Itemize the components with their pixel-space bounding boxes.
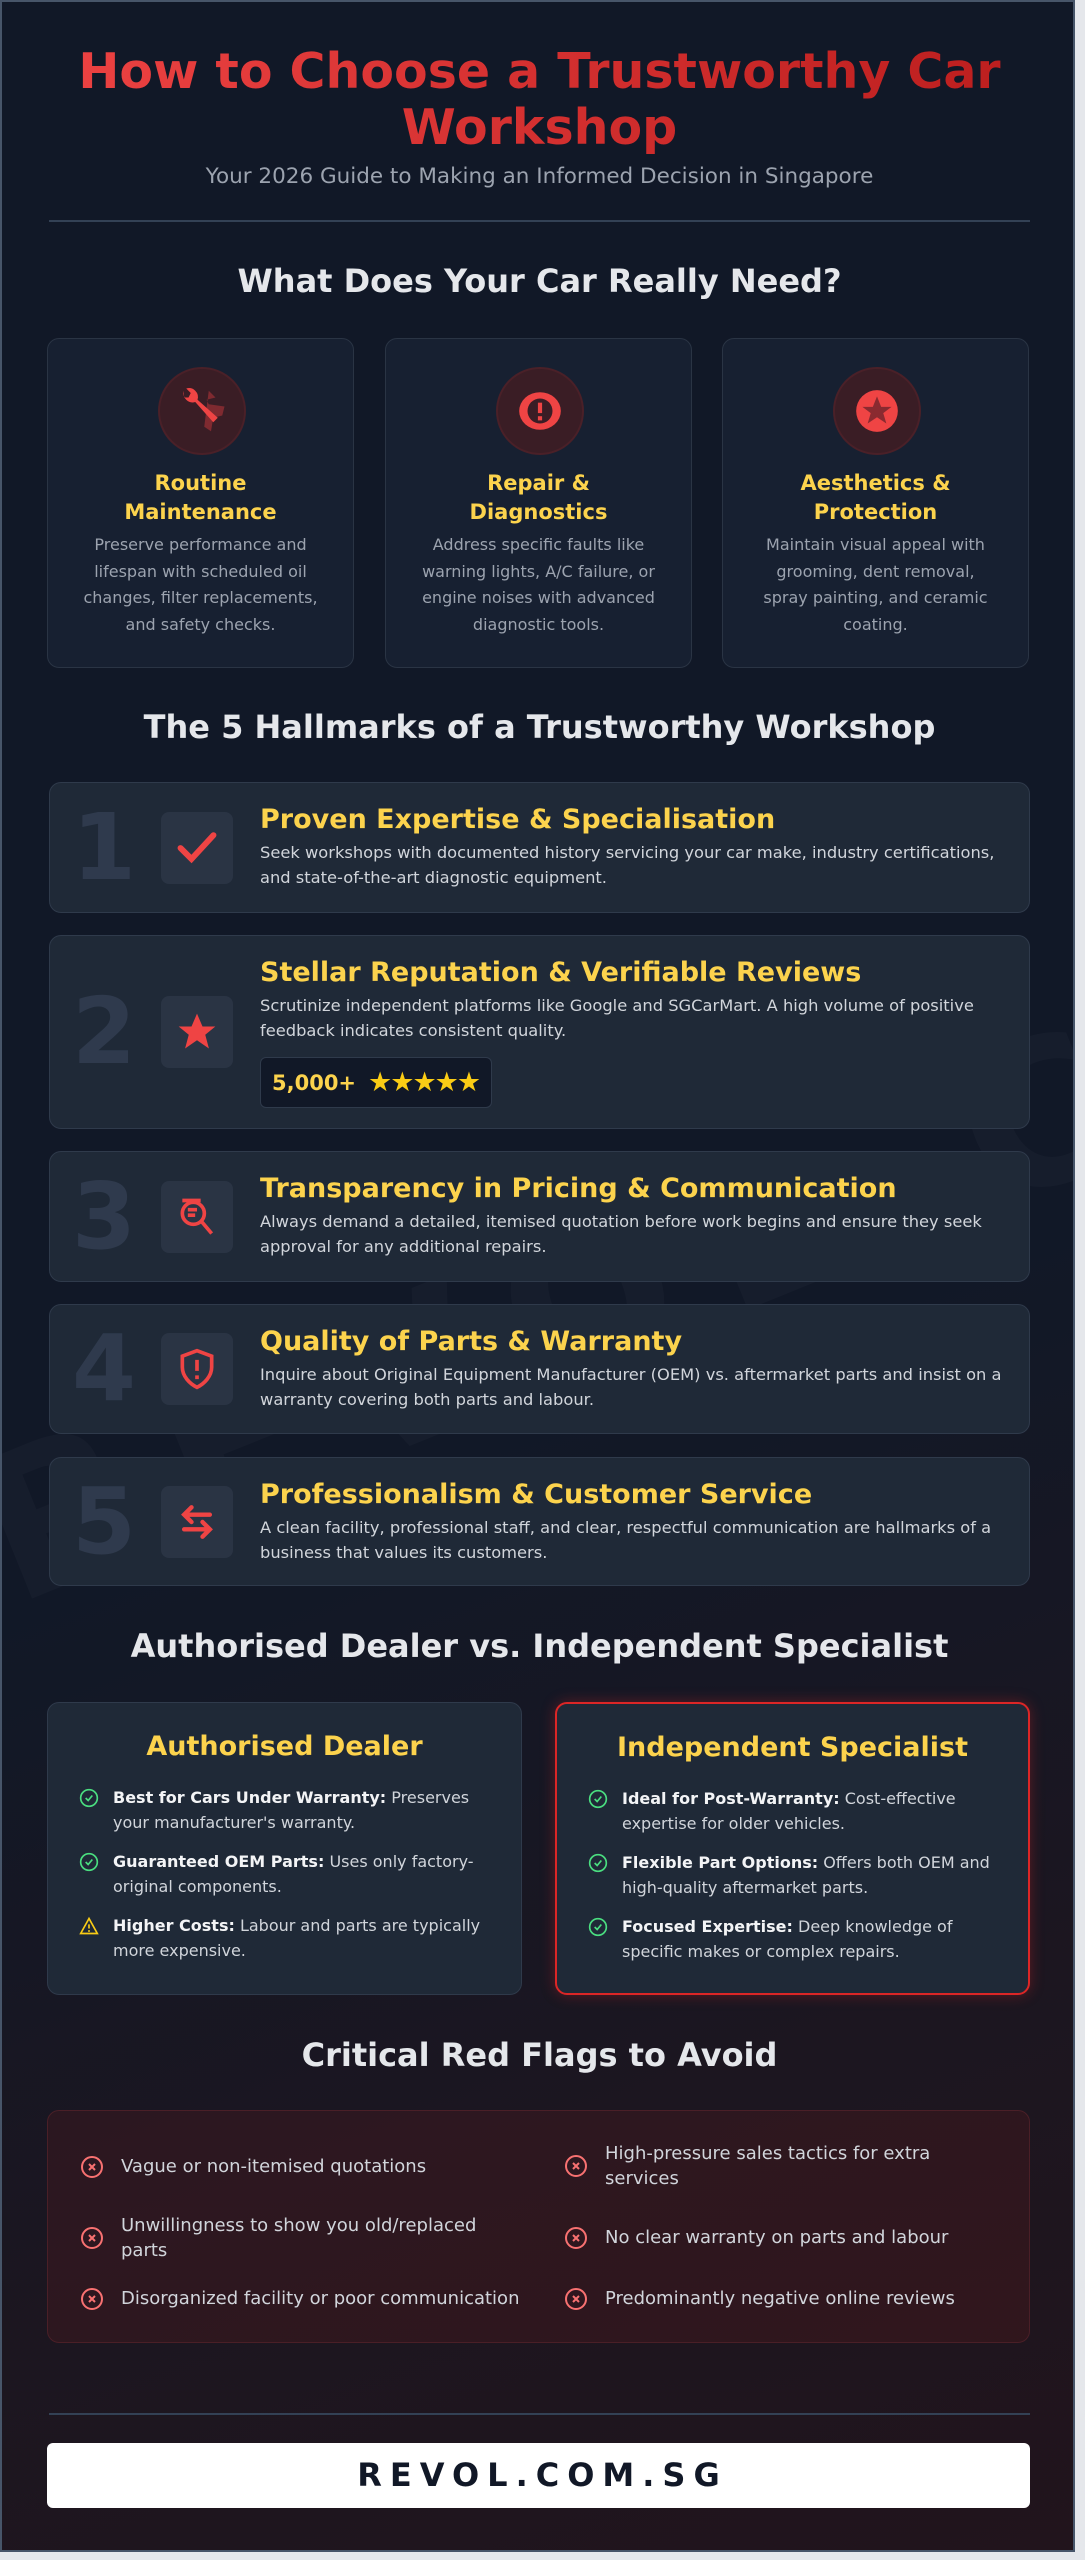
panel: independent specialist: Ideal for Post-Warranty: Cost-effective expertise for older vehicles. — [622, 1789, 956, 1833]
panel: authorised dealer: Best for Cars Under Warranty: Preserves your manufacturer's warranty. — [113, 1788, 469, 1832]
card: aesthetics — [722, 338, 1029, 668]
card: aesthetics: Maintain visual appeal with grooming, dent removal, spray painting, and ceramic coating. — [763, 535, 988, 634]
hallmark 1: 1 — [72, 794, 136, 900]
heading: needs: What Does Your Car Really Need? — [238, 262, 842, 300]
icon: search — [161, 1180, 233, 1252]
hallmark 5: Professionalism & Customer Service — [260, 1479, 812, 1510]
heading: comparison: Authorised Dealer vs. Independent Specialist — [131, 1627, 948, 1665]
hallmark 5: 5 — [72, 1468, 136, 1574]
hallmark 1: Seek workshops with documented history servicing your car make, industry certifications, and state-of-the-art diagnostic equipment. — [260, 843, 994, 887]
hallmark 4: 4 — [72, 1315, 136, 1422]
icon: star — [161, 996, 233, 1068]
card: routine maintenance: Preserve performance and lifespan with scheduled oil changes, filter replacements, and safety checks. — [83, 535, 318, 634]
hallmark 4: Inquire about Original Equipment Manufacturer (OEM) vs. aftermarket parts and insist on a warranty covering both parts and labour. — [260, 1365, 1002, 1409]
card: repair: Diagnostics — [470, 500, 607, 524]
heading: red flags: Critical Red Flags to Avoid — [302, 2036, 777, 2074]
hallmark 3: 3 — [72, 1162, 136, 1270]
footer brand bar — [47, 2443, 1030, 2508]
panel: red flags: Unwillingness to show you old/replaced parts — [121, 2215, 476, 2261]
heading: hallmarks: The 5 Hallmarks of a Trustworthy Workshop — [144, 708, 935, 746]
icon: star badge — [833, 367, 921, 455]
hallmark 2: Scrutinize independent platforms like Google and SGCarMart. A high volume of positive feedback indicates consistent quality. — [260, 996, 974, 1040]
card: routine maintenance: Maintenance — [124, 500, 277, 524]
title — [2, 44, 1077, 156]
hallmark 5: A clean facility, professional staff, and clear, respectful communication are hallmarks of a business that values its customers. — [260, 1518, 991, 1562]
hallmark 4: Quality of Parts & Warranty — [260, 1326, 682, 1357]
hallmark 2: 2 — [72, 978, 136, 1085]
icon: wrench — [158, 367, 246, 455]
hallmark 2 — [49, 935, 1030, 1129]
panel: authorised dealer: Guaranteed OEM Parts: Uses only factory-original components. — [113, 1852, 474, 1896]
icon: exchange arrows — [161, 1486, 233, 1558]
panel: red flags: Predominantly negative online reviews — [605, 2288, 955, 2309]
panel: authorised dealer — [47, 1702, 522, 1995]
panel: red flags: Disorganized facility or poor communication — [121, 2288, 519, 2309]
rating badge — [260, 1057, 492, 1108]
hallmark 3: Always demand a detailed, itemised quotation before work begins and ensure they seek approval for any additional repairs. — [260, 1212, 982, 1256]
card: routine maintenance: Routine — [154, 471, 246, 495]
hallmark 1 — [49, 782, 1030, 913]
icon: shield — [161, 1333, 233, 1405]
panel: red flags: No clear warranty on parts and labour — [605, 2227, 948, 2248]
panel: independent specialist: Flexible Part Options: Offers both OEM and high-quality aftermarket parts. — [622, 1853, 990, 1897]
card: routine maintenance — [47, 338, 354, 668]
hallmark 3 — [49, 1151, 1030, 1282]
icon: check — [161, 812, 233, 884]
footer brand bar: REVOL.COM.SG — [357, 2456, 728, 2494]
hallmark 2: Stellar Reputation & Verifiable Reviews — [260, 957, 861, 988]
hallmark 5 — [49, 1457, 1030, 1586]
panel: independent specialist: Independent Specialist — [617, 1732, 968, 1763]
panel: independent specialist: Focused Expertise: Deep knowledge of specific makes or complex repairs. — [622, 1917, 952, 1961]
panel: authorised dealer: Higher Costs: Labour and parts are typically more expensive. — [113, 1916, 480, 1960]
title: Workshop — [402, 99, 677, 156]
card: aesthetics: Protection — [814, 500, 937, 524]
card: repair: Repair & — [487, 471, 590, 495]
panel: authorised dealer: Authorised Dealer — [146, 1731, 423, 1762]
hallmark 4 — [49, 1304, 1030, 1434]
subtitle: Your 2026 Guide to Making an Informed Decision in Singapore — [206, 164, 873, 189]
rating badge: ★★★★★ — [368, 1067, 479, 1098]
panel: independent specialist — [555, 1702, 1030, 1995]
card: repair: Address specific faults like warning lights, A/C failure, or engine noises with advanced diagnostic tools. — [422, 535, 655, 634]
title: How to Choose a Trustworthy Car — [78, 43, 1001, 100]
panel: red flags: High-pressure sales tactics for extra services — [605, 2143, 930, 2189]
card: repair — [385, 338, 692, 668]
rating badge: 5,000+ — [272, 1070, 356, 1094]
hallmark 1: Proven Expertise & Specialisation — [260, 804, 775, 835]
panel: red flags — [47, 2110, 1030, 2343]
icon: alert — [496, 367, 584, 455]
hallmark 3: Transparency in Pricing & Communication — [260, 1173, 897, 1204]
card: aesthetics: Aesthetics & — [800, 471, 951, 495]
panel: red flags: Vague or non-itemised quotations — [121, 2156, 426, 2177]
